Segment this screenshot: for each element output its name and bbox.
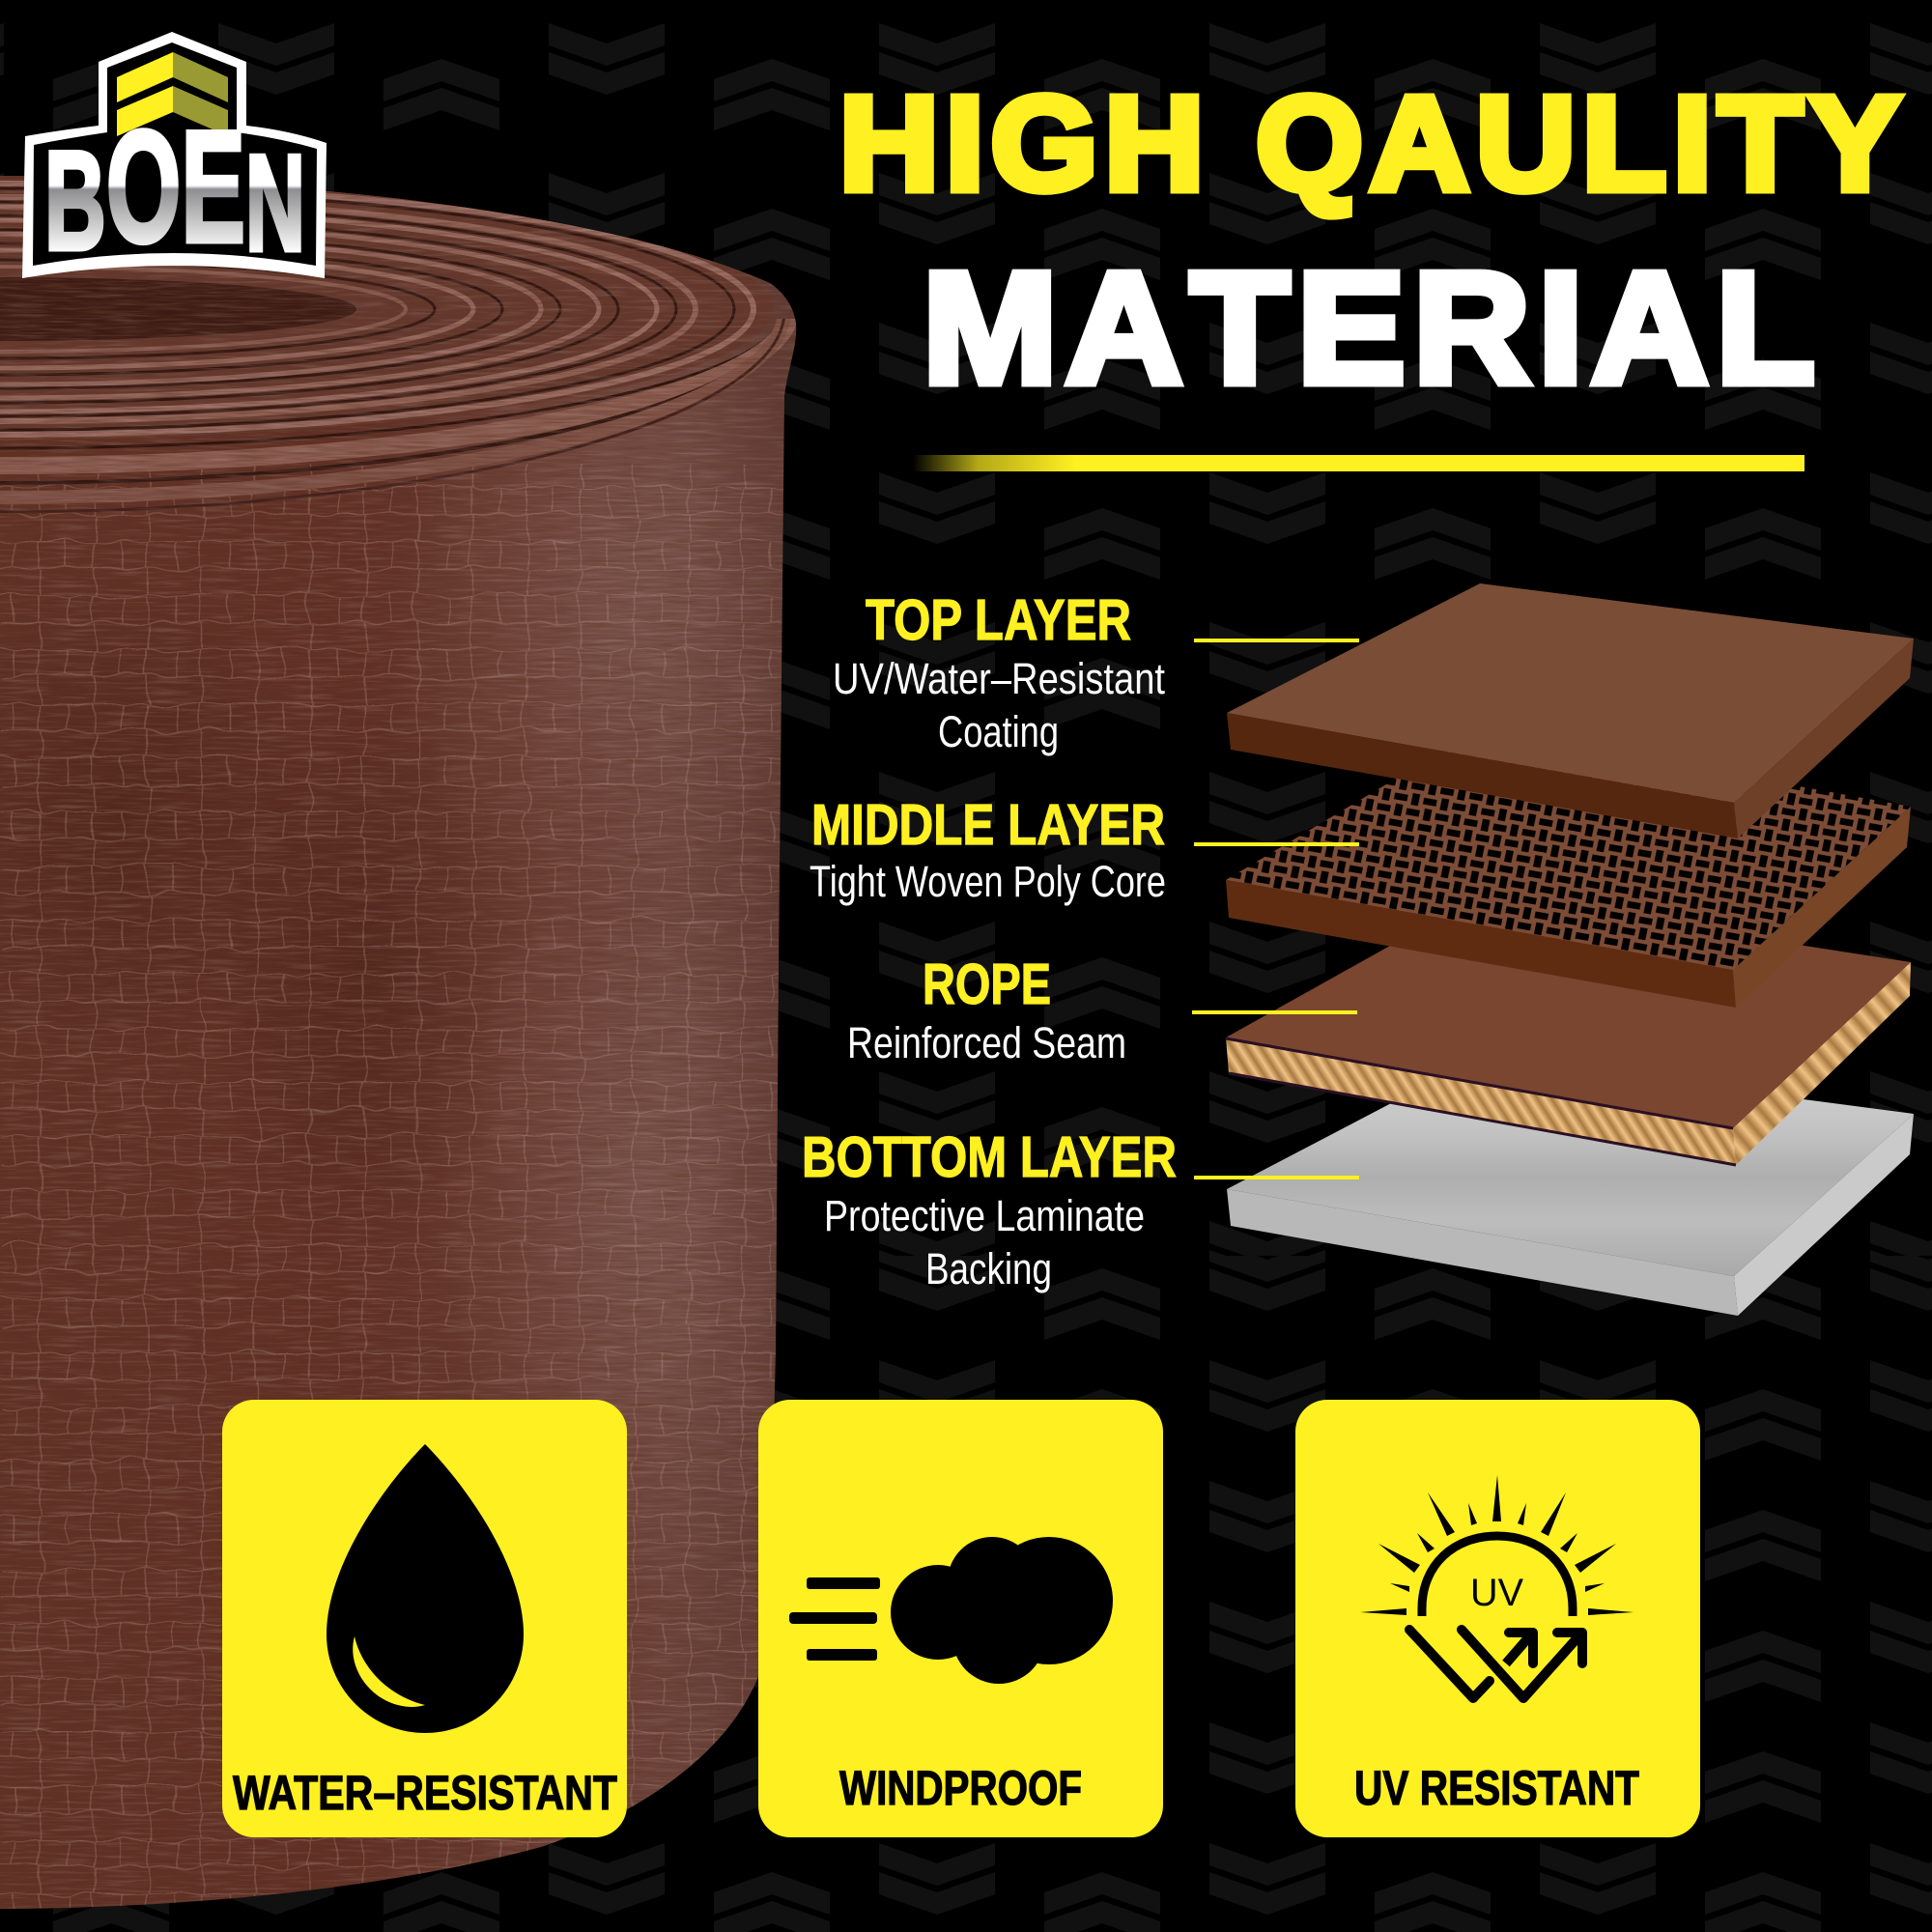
label: rope: Reinforced Seam xyxy=(847,1018,1126,1067)
label: middle layer xyxy=(810,793,1166,906)
logo: BOEN xyxy=(22,32,327,280)
icon: uv sun with reflected arrows xyxy=(1360,1475,1634,1698)
card: windproof: WINDPROOF xyxy=(839,1761,1082,1815)
roll centre hole xyxy=(0,277,356,341)
layer: top coating xyxy=(1227,583,1914,838)
logo wordmark: B xyxy=(44,122,146,279)
label: bottom layer: Backing xyxy=(925,1244,1052,1293)
label: top layer: Coating xyxy=(938,707,1059,756)
label: bottom layer: Protective Laminate xyxy=(824,1191,1145,1240)
roll rim folds xyxy=(0,319,796,514)
label: rope: ROPE xyxy=(923,952,1051,1016)
leader lines xyxy=(1192,639,1359,1179)
label: middle layer: Tight Woven Poly Core xyxy=(810,857,1166,906)
icon: uv sun with reflected arrows: UV xyxy=(1470,1572,1523,1614)
title underline xyxy=(913,455,1804,471)
card: uv resistant: UV RESISTANT xyxy=(1354,1761,1639,1815)
label: bottom layer: BOTTOM LAYER xyxy=(802,1125,1177,1189)
roll top rings xyxy=(0,179,773,440)
icon: water drop xyxy=(327,1444,524,1733)
photo: rolled brown tarp xyxy=(0,176,796,1909)
layer: rope reinforced xyxy=(1226,895,1911,1165)
label: top layer: TOP LAYER xyxy=(866,588,1131,652)
card: uv resistant xyxy=(1295,1400,1700,1837)
icon: wind and cloud xyxy=(789,1537,1113,1684)
label: rope xyxy=(847,952,1126,1067)
card: water-resistant xyxy=(222,1400,627,1837)
label: top layer: UV/Water–Resistant xyxy=(833,654,1165,703)
logo wordmark: N xyxy=(245,127,305,280)
label: top layer xyxy=(833,588,1165,756)
card: windproof xyxy=(758,1400,1163,1837)
layer: middle woven core xyxy=(1226,728,1911,1008)
title: MATERIAL: MATERIAL xyxy=(923,240,1823,416)
label: middle layer: MIDDLE LAYER xyxy=(811,793,1165,857)
label: bottom layer xyxy=(802,1125,1177,1293)
card: water-resistant: WATER–RESISTANT xyxy=(233,1766,617,1820)
layer: bottom grey laminate xyxy=(1227,1057,1914,1316)
title: HIGH QAULITY: HIGH QAULITY xyxy=(839,70,1908,218)
logo wordmark: OE xyxy=(106,98,245,275)
